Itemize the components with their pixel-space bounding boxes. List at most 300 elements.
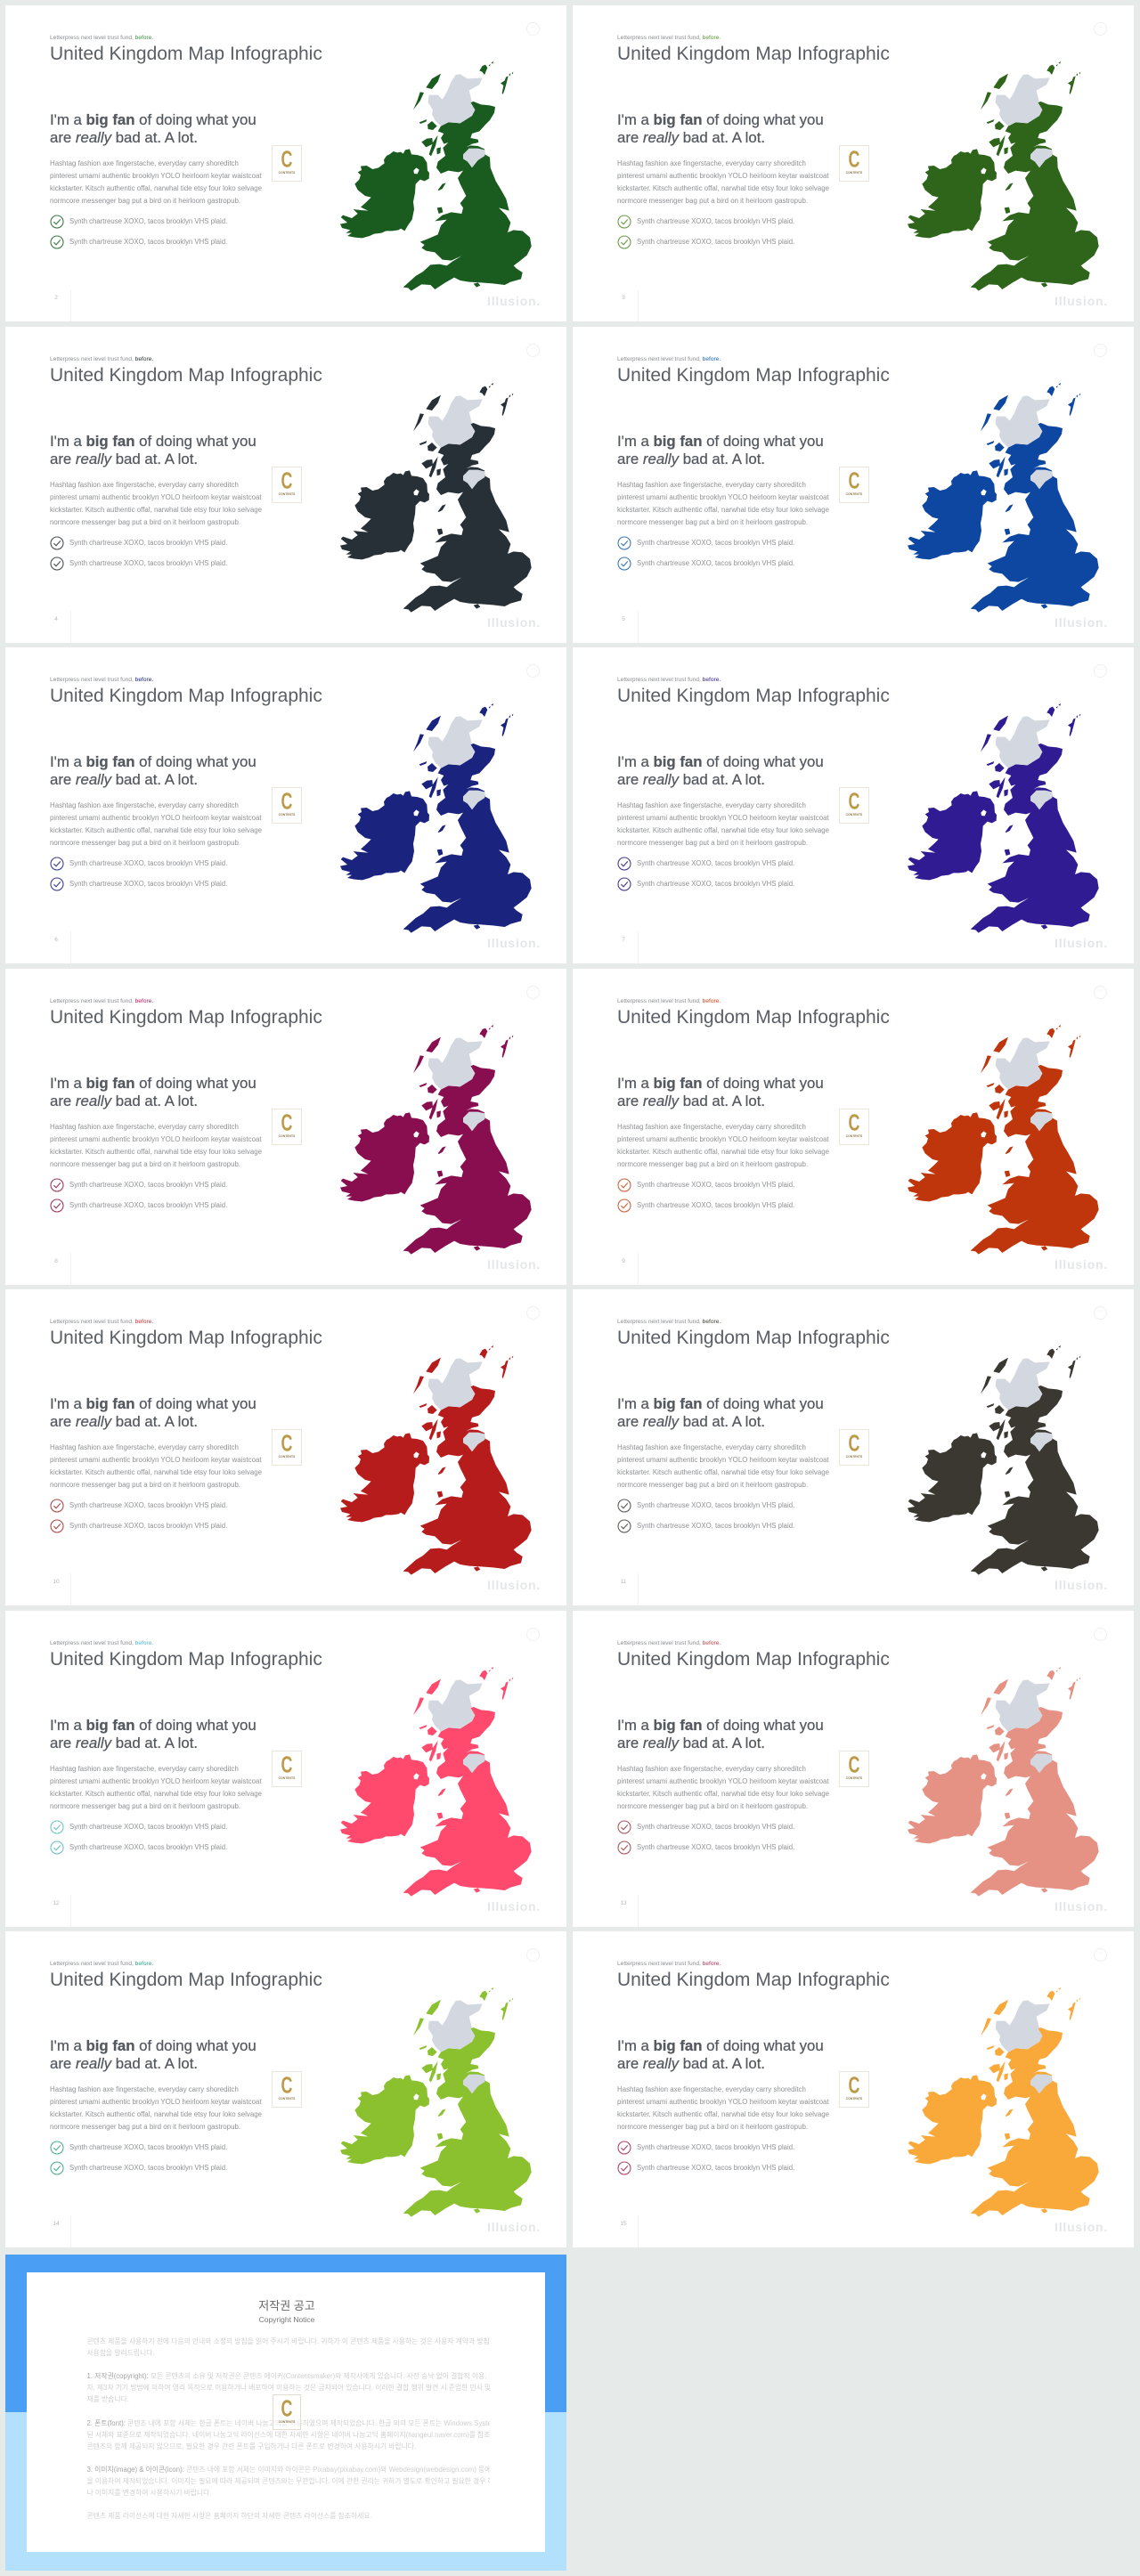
heading: I'm a big fan of doing what you <box>50 2037 256 2054</box>
map of UK and Ireland <box>888 1337 1120 1605</box>
check item: Synth chartreuse XOXO, tacos brooklyn VHS plaid. <box>69 1181 227 1189</box>
body text <box>617 1442 829 1491</box>
body text: Hashtag fashion axe fingerstache, everyday carry shoreditch <box>50 159 239 167</box>
logo badge: CONTENTS <box>846 492 862 496</box>
check item <box>50 1179 227 1191</box>
logo badge: CONTENTS <box>279 1134 295 1138</box>
heading: I'm a big fan of doing what you <box>617 433 824 450</box>
brand mark: Illusion. <box>1054 1257 1108 1272</box>
body text: normcore messenger bag put a bird on it heirloom gastropub. <box>50 1160 240 1168</box>
body text <box>617 1763 829 1813</box>
logo badge: CONTENTS <box>846 1134 862 1138</box>
eyebrow text: Letterpress next level trust fund, before. <box>50 1318 153 1325</box>
body text: kickstarter. Kitsch authentic offal, narwhal tide etsy four loko selvage <box>617 506 829 514</box>
panel: copyright notice <box>5 2255 566 2571</box>
logo badge: C <box>281 1110 292 1136</box>
logo badge: CONTENTS <box>279 2097 295 2101</box>
logo badge <box>273 2394 301 2430</box>
brand mark: Illusion. <box>487 1257 541 1272</box>
logo badge: C <box>281 2073 292 2099</box>
body text <box>50 1763 262 1813</box>
check item: Synth chartreuse XOXO, tacos brooklyn VHS plaid. <box>69 880 227 888</box>
body text: pinterest umami authentic brooklyn YOLO heirloom keytar waistcoat <box>50 172 262 180</box>
menu icon: ··· <box>1097 666 1103 672</box>
check item <box>50 557 227 570</box>
body text: pinterest umami authentic brooklyn YOLO heirloom keytar waistcoat <box>50 1777 262 1785</box>
heading: are really bad at. A lot. <box>617 451 765 467</box>
menu icon: ··· <box>530 24 536 30</box>
logo badge <box>272 787 302 824</box>
body text: normcore messenger bag put a bird on it heirloom gastropub. <box>50 839 240 847</box>
page number: 2 <box>54 295 58 301</box>
body text: normcore messenger bag put a bird on it heirloom gastropub. <box>50 1481 240 1489</box>
check item: Synth chartreuse XOXO, tacos brooklyn VHS plaid. <box>69 1823 227 1831</box>
panel: slide 8 magenta <box>5 969 566 1285</box>
body text <box>617 801 829 847</box>
heading: I'm a big fan of doing what you <box>617 1395 824 1412</box>
logo badge: C <box>849 2073 859 2099</box>
check item: Synth chartreuse XOXO, tacos brooklyn VHS plaid. <box>637 880 794 888</box>
check item: Synth chartreuse XOXO, tacos brooklyn VHS plaid. <box>637 539 794 547</box>
logo badge: CONTENTS <box>279 813 295 817</box>
heading <box>50 111 256 146</box>
page number: 14 <box>53 2221 60 2227</box>
heading: I'm a big fan of doing what you <box>50 1395 256 1412</box>
menu icon: ··· <box>1097 1308 1103 1314</box>
logo badge: C <box>281 1431 292 1457</box>
menu icon: ··· <box>1097 987 1103 994</box>
body text <box>617 481 829 526</box>
heading <box>50 1717 256 1752</box>
body text: pinterest umami authentic brooklyn YOLO heirloom keytar waistcoat <box>617 1135 829 1143</box>
logo badge: C <box>849 1752 859 1778</box>
page number: 9 <box>622 1258 625 1264</box>
logo badge: C <box>849 147 859 173</box>
logo badge <box>272 467 302 503</box>
menu icon: ··· <box>530 1950 536 1956</box>
check item <box>50 1499 219 1513</box>
page number: 3 <box>622 295 625 301</box>
logo badge <box>839 467 869 503</box>
heading: are really bad at. A lot. <box>50 1093 198 1109</box>
heading <box>617 1075 824 1110</box>
check item: Synth chartreuse XOXO, tacos brooklyn VHS plaid. <box>637 559 794 567</box>
check item <box>50 857 227 871</box>
check item <box>50 1199 219 1213</box>
panel: slide 13 salmon <box>573 1611 1134 1927</box>
heading: are really bad at. A lot. <box>617 129 765 146</box>
heading: I'm a big fan of doing what you <box>617 1075 824 1092</box>
menu icon: ··· <box>1097 1950 1103 1956</box>
map of UK and Ireland <box>908 703 1099 933</box>
logo badge <box>272 1429 302 1466</box>
check item <box>617 1519 786 1533</box>
body text: Hashtag fashion axe fingerstache, everyday carry shoreditch <box>617 1765 806 1773</box>
logo badge: CONTENTS <box>279 1776 295 1780</box>
check item: Synth chartreuse XOXO, tacos brooklyn VHS plaid. <box>637 1501 794 1509</box>
check item: Synth chartreuse XOXO, tacos brooklyn VHS plaid. <box>637 2164 794 2172</box>
title: United Kingdom Map Infographic <box>617 1649 890 1670</box>
check item: Synth chartreuse XOXO, tacos brooklyn VHS plaid. <box>69 1522 227 1530</box>
logo badge: CONTENTS <box>846 1455 862 1459</box>
body text: kickstarter. Kitsch authentic offal, narwhal tide etsy four loko selvage <box>617 1790 829 1798</box>
heading: I'm a big fan of doing what you <box>617 1717 824 1734</box>
panel: slide 5 blue <box>573 327 1134 643</box>
title: United Kingdom Map Infographic <box>50 365 322 386</box>
heading <box>617 1395 824 1431</box>
check item: Synth chartreuse XOXO, tacos brooklyn VHS plaid. <box>637 859 794 867</box>
heading <box>50 753 256 788</box>
check item <box>617 857 794 871</box>
body text: kickstarter. Kitsch authentic offal, narwhal tide etsy four loko selvage <box>50 1790 262 1798</box>
logo badge <box>839 145 869 182</box>
check item <box>50 878 227 890</box>
map of UK and Ireland <box>888 1979 1120 2247</box>
panel: slide 15 amber <box>573 1931 1134 2247</box>
brand mark: Illusion. <box>1054 1899 1108 1914</box>
logo badge: C <box>281 468 292 494</box>
body text: Hashtag fashion axe fingerstache, everyday carry shoreditch <box>50 481 239 489</box>
brand mark: Illusion. <box>1054 2220 1108 2234</box>
body text: normcore messenger bag put a bird on it heirloom gastropub. <box>617 839 808 847</box>
body text: normcore messenger bag put a bird on it heirloom gastropub. <box>50 197 240 205</box>
check item <box>617 2161 786 2175</box>
heading <box>617 1717 824 1752</box>
page number: 5 <box>622 616 625 622</box>
menu icon <box>526 664 540 678</box>
title: United Kingdom Map Infographic <box>617 1328 890 1348</box>
check item <box>617 1178 786 1192</box>
logo badge: C <box>849 1110 859 1136</box>
logo badge <box>272 1751 302 1787</box>
check item <box>617 878 794 890</box>
check item: Synth chartreuse XOXO, tacos brooklyn VHS plaid. <box>69 1201 227 1209</box>
check item <box>617 1841 786 1855</box>
body text <box>50 1442 262 1491</box>
heading <box>50 1075 256 1109</box>
eyebrow text: Letterpress next level trust fund, before. <box>50 677 153 682</box>
body text: pinterest umami authentic brooklyn YOLO heirloom keytar waistcoat <box>617 814 829 822</box>
menu icon <box>1094 1306 1107 1320</box>
check item: Synth chartreuse XOXO, tacos brooklyn VHS plaid. <box>637 238 794 246</box>
body text: Hashtag fashion axe fingerstache, everyday carry shoreditch <box>50 1443 239 1451</box>
body text: pinterest umami authentic brooklyn YOLO heirloom keytar waistcoat <box>617 172 829 180</box>
page number: 12 <box>53 1900 60 1906</box>
check item: Synth chartreuse XOXO, tacos brooklyn VHS plaid. <box>69 559 227 567</box>
body text: pinterest umami authentic brooklyn YOLO heirloom keytar waistcoat <box>617 493 829 501</box>
check item: Synth chartreuse XOXO, tacos brooklyn VHS plaid. <box>69 217 227 225</box>
body text <box>50 481 262 526</box>
heading: are really bad at. A lot. <box>50 129 198 146</box>
page number: 13 <box>620 1900 627 1906</box>
check item: Synth chartreuse XOXO, tacos brooklyn VHS plaid. <box>637 2143 794 2151</box>
check item <box>50 536 227 550</box>
copyright section 3: 나 이미지를 변경하여 사용하시기 바랍니다. <box>87 2488 211 2497</box>
logo badge: CONTENTS <box>846 813 862 817</box>
menu icon <box>1094 1948 1107 1962</box>
heading <box>50 2037 256 2073</box>
body text: kickstarter. Kitsch authentic offal, narwhal tide etsy four loko selvage <box>50 1148 262 1156</box>
menu icon: ··· <box>1097 24 1103 30</box>
heading: are really bad at. A lot. <box>50 451 198 467</box>
body text: kickstarter. Kitsch authentic offal, narwhal tide etsy four loko selvage <box>617 184 829 192</box>
logo badge: CONTENTS <box>279 171 295 175</box>
copyright subtitle: Copyright Notice <box>259 2315 314 2324</box>
logo badge: C <box>849 789 859 815</box>
menu icon <box>526 986 540 999</box>
copyright closing note: 콘텐츠 제품 라이선스에 대한 자세한 사항은 홈페이지 하단의 자세한 콘텐츠 라이선스를 참조하세요. <box>87 2511 372 2520</box>
heading: I'm a big fan of doing what you <box>617 753 824 770</box>
body text: Hashtag fashion axe fingerstache, everyday carry shoreditch <box>50 801 239 809</box>
check item <box>617 536 794 550</box>
check item <box>50 235 227 249</box>
heading <box>50 1395 256 1431</box>
logo badge: CONTENTS <box>846 171 862 175</box>
panel: slide 14 lime <box>5 1931 566 2247</box>
heading: are really bad at. A lot. <box>50 2055 198 2072</box>
heading <box>617 753 824 788</box>
body text: kickstarter. Kitsch authentic offal, narwhal tide etsy four loko selvage <box>50 2110 262 2118</box>
body text: kickstarter. Kitsch authentic offal, narwhal tide etsy four loko selvage <box>50 184 262 192</box>
title: United Kingdom Map Infographic <box>50 1007 322 1028</box>
body text: pinterest umami authentic brooklyn YOLO heirloom keytar waistcoat <box>50 493 262 501</box>
heading: I'm a big fan of doing what you <box>50 111 256 128</box>
body text <box>50 1123 262 1168</box>
menu icon: ··· <box>530 1308 536 1314</box>
body text <box>50 2084 262 2133</box>
logo badge <box>839 787 869 824</box>
logo badge <box>839 1109 869 1145</box>
check item: Synth chartreuse XOXO, tacos brooklyn VHS plaid. <box>69 1843 227 1851</box>
page number: 10 <box>53 1579 60 1585</box>
copyright section 1 <box>87 2370 490 2404</box>
check item: Synth chartreuse XOXO, tacos brooklyn VHS plaid. <box>69 2164 227 2172</box>
panel: slide 3 olive green <box>573 5 1134 321</box>
map of UK and Ireland <box>321 1659 552 1926</box>
check item: Synth chartreuse XOXO, tacos brooklyn VHS plaid. <box>69 238 227 246</box>
brand mark: Illusion. <box>487 1578 541 1592</box>
body text: Hashtag fashion axe fingerstache, everyday carry shoreditch <box>617 2085 806 2093</box>
body text: Hashtag fashion axe fingerstache, everyday carry shoreditch <box>617 801 806 809</box>
brand mark: Illusion. <box>487 1899 541 1914</box>
menu icon: ··· <box>530 987 536 994</box>
heading: are really bad at. A lot. <box>617 1735 765 1751</box>
body text: normcore messenger bag put a bird on it heirloom gastropub. <box>617 1802 808 1810</box>
body text: Hashtag fashion axe fingerstache, everyday carry shoreditch <box>50 1123 239 1131</box>
menu icon: ··· <box>530 1629 536 1636</box>
panel: slide 2 green <box>5 5 566 321</box>
logo badge: C <box>849 1431 859 1457</box>
body text: normcore messenger bag put a bird on it heirloom gastropub. <box>617 518 808 526</box>
body text <box>50 801 262 847</box>
copyright intro: 사용함을 알려드립니다. <box>87 2349 155 2356</box>
brand mark: Illusion. <box>1054 615 1108 630</box>
heading: I'm a big fan of doing what you <box>50 433 256 450</box>
map of UK and Ireland <box>321 1017 552 1284</box>
check item: Synth chartreuse XOXO, tacos brooklyn VHS plaid. <box>637 1181 794 1189</box>
body text: normcore messenger bag put a bird on it heirloom gastropub. <box>50 2123 240 2131</box>
check item: Synth chartreuse XOXO, tacos brooklyn VHS plaid. <box>69 1501 227 1509</box>
menu icon <box>526 22 540 36</box>
brand mark: Illusion. <box>487 615 541 630</box>
check item <box>50 2141 219 2155</box>
logo badge <box>839 1751 869 1787</box>
logo badge: CONTENTS <box>279 1455 295 1459</box>
logo badge: CONTENTS <box>279 2420 295 2424</box>
heading: I'm a big fan of doing what you <box>50 753 256 770</box>
body text: pinterest umami authentic brooklyn YOLO heirloom keytar waistcoat <box>50 1135 262 1143</box>
body text: kickstarter. Kitsch authentic offal, narwhal tide etsy four loko selvage <box>50 1468 262 1476</box>
map of UK and Ireland <box>340 383 532 613</box>
panel: slide 12 pink <box>5 1611 566 1927</box>
logo badge: C <box>281 1752 292 1778</box>
copyright title: 저작권 공고 <box>258 2299 315 2312</box>
brand mark: Illusion. <box>487 294 541 308</box>
body text: normcore messenger bag put a bird on it heirloom gastropub. <box>50 518 240 526</box>
logo badge <box>272 145 302 182</box>
page number: 11 <box>621 1579 626 1585</box>
title: United Kingdom Map Infographic <box>50 686 322 706</box>
logo badge <box>272 1109 302 1145</box>
body text: pinterest umami authentic brooklyn YOLO heirloom keytar waistcoat <box>50 2098 262 2106</box>
body text: kickstarter. Kitsch authentic offal, narwhal tide etsy four loko selvage <box>617 826 829 834</box>
check item <box>617 235 794 249</box>
title: United Kingdom Map Infographic <box>617 365 890 386</box>
map of UK and Ireland <box>908 383 1099 613</box>
body text: kickstarter. Kitsch authentic offal, narwhal tide etsy four loko selvage <box>50 506 262 514</box>
body text: normcore messenger bag put a bird on it heirloom gastropub. <box>617 1481 808 1489</box>
check item <box>617 215 794 228</box>
body text: pinterest umami authentic brooklyn YOLO heirloom keytar waistcoat <box>50 1456 262 1464</box>
panel: slide 10 red <box>5 1289 566 1605</box>
eyebrow text: Letterpress next level trust fund, before. <box>617 1961 721 1966</box>
body text: kickstarter. Kitsch authentic offal, narwhal tide etsy four loko selvage <box>617 1148 829 1156</box>
body text: pinterest umami authentic brooklyn YOLO heirloom keytar waistcoat <box>617 2098 829 2106</box>
body text: kickstarter. Kitsch authentic offal, narwhal tide etsy four loko selvage <box>50 826 262 834</box>
copyright section 3 <box>87 2463 490 2499</box>
white notice card <box>27 2272 545 2552</box>
check item: Synth chartreuse XOXO, tacos brooklyn VHS plaid. <box>637 1522 794 1530</box>
title: United Kingdom Map Infographic <box>617 1970 890 1990</box>
check item <box>50 215 227 228</box>
body text: normcore messenger bag put a bird on it heirloom gastropub. <box>617 2123 808 2131</box>
eyebrow text: Letterpress next level trust fund, before. <box>50 1961 153 1966</box>
heading <box>617 111 824 146</box>
body text: normcore messenger bag put a bird on it heirloom gastropub. <box>50 1802 240 1810</box>
heading: I'm a big fan of doing what you <box>50 1717 256 1734</box>
menu icon <box>526 1306 540 1320</box>
heading: are really bad at. A lot. <box>50 1735 198 1751</box>
eyebrow text: Letterpress next level trust fund, before. <box>50 34 153 41</box>
check item: Synth chartreuse XOXO, tacos brooklyn VHS plaid. <box>637 1843 794 1851</box>
body text: Hashtag fashion axe fingerstache, everyday carry shoreditch <box>617 159 806 167</box>
menu icon: ··· <box>1097 345 1103 352</box>
check item <box>50 1519 219 1533</box>
body text: Hashtag fashion axe fingerstache, everyday carry shoreditch <box>617 1443 806 1451</box>
body text: Hashtag fashion axe fingerstache, everyday carry shoreditch <box>50 2085 239 2093</box>
heading: I'm a big fan of doing what you <box>50 1075 256 1092</box>
page number: 15 <box>620 2221 627 2227</box>
panel: slide 4 charcoal <box>5 327 566 643</box>
map of UK and Ireland <box>888 1017 1120 1284</box>
logo badge: C <box>849 468 859 494</box>
brand mark: Illusion. <box>1054 1578 1108 1592</box>
logo badge: CONTENTS <box>846 2097 862 2101</box>
body text <box>617 159 829 205</box>
heading: are really bad at. A lot. <box>50 1413 198 1430</box>
body text: pinterest umami authentic brooklyn YOLO heirloom keytar waistcoat <box>617 1456 829 1464</box>
check item: Synth chartreuse XOXO, tacos brooklyn VHS plaid. <box>69 859 227 867</box>
menu icon: ··· <box>530 666 536 672</box>
title: United Kingdom Map Infographic <box>617 1007 890 1028</box>
check item: Synth chartreuse XOXO, tacos brooklyn VHS plaid. <box>69 539 227 547</box>
menu icon <box>1094 664 1107 678</box>
body text: Hashtag fashion axe fingerstache, everyday carry shoreditch <box>617 481 806 489</box>
heading <box>50 433 256 467</box>
map of UK and Ireland <box>321 1979 552 2247</box>
check item <box>50 1820 219 1834</box>
page number: 4 <box>54 616 58 622</box>
check item: Synth chartreuse XOXO, tacos brooklyn VHS plaid. <box>637 217 794 225</box>
eyebrow text: Letterpress next level trust fund, before. <box>50 356 153 362</box>
title: United Kingdom Map Infographic <box>50 1649 322 1670</box>
eyebrow text: Letterpress next level trust fund, before. <box>617 356 721 362</box>
check item: Synth chartreuse XOXO, tacos brooklyn VHS plaid. <box>637 1201 794 1209</box>
body text: Hashtag fashion axe fingerstache, everyday carry shoreditch <box>617 1123 806 1131</box>
heading: are really bad at. A lot. <box>617 1413 765 1430</box>
eyebrow text: Letterpress next level trust fund, before. <box>617 34 721 41</box>
body text: normcore messenger bag put a bird on it heirloom gastropub. <box>617 197 808 205</box>
title: United Kingdom Map Infographic <box>50 1970 322 1990</box>
page number: 8 <box>54 1258 58 1264</box>
logo badge: C <box>281 2396 292 2422</box>
check item: Synth chartreuse XOXO, tacos brooklyn VHS plaid. <box>69 2143 227 2151</box>
brand mark: Illusion. <box>1054 294 1108 308</box>
copyright intro <box>87 2335 490 2358</box>
heading: are really bad at. A lot. <box>617 2055 765 2072</box>
eyebrow text: Letterpress next level trust fund, before. <box>50 997 153 1004</box>
logo badge <box>272 2071 302 2108</box>
check item <box>50 2161 219 2175</box>
title: United Kingdom Map Infographic <box>50 1328 322 1348</box>
panel: slide 6 navy <box>5 647 566 963</box>
body text: pinterest umami authentic brooklyn YOLO heirloom keytar waistcoat <box>50 814 262 822</box>
logo badge <box>839 2071 869 2108</box>
body text: kickstarter. Kitsch authentic offal, narwhal tide etsy four loko selvage <box>617 1468 829 1476</box>
check item: Synth chartreuse XOXO, tacos brooklyn VHS plaid. <box>637 1823 794 1831</box>
panel: slide 11 dark olive grey <box>573 1289 1134 1605</box>
body text <box>617 1121 829 1171</box>
menu icon <box>526 1948 540 1962</box>
copyright section 1: 재를 받습니다. <box>87 2395 129 2402</box>
title: United Kingdom Map Infographic <box>617 686 890 706</box>
copyright section 2 <box>87 2417 490 2452</box>
menu icon: ··· <box>1097 1629 1103 1636</box>
logo badge: C <box>281 147 292 173</box>
check item <box>617 2141 786 2155</box>
menu icon: ··· <box>530 345 536 352</box>
menu icon <box>526 344 540 357</box>
body text <box>617 2084 829 2133</box>
check item <box>617 1499 786 1513</box>
check item <box>617 1199 786 1213</box>
heading: I'm a big fan of doing what you <box>617 111 824 128</box>
logo badge: CONTENTS <box>279 492 295 496</box>
menu icon <box>526 1628 540 1641</box>
title: United Kingdom Map Infographic <box>50 44 322 64</box>
brand mark: Illusion. <box>487 2220 541 2234</box>
title: United Kingdom Map Infographic <box>617 44 890 64</box>
